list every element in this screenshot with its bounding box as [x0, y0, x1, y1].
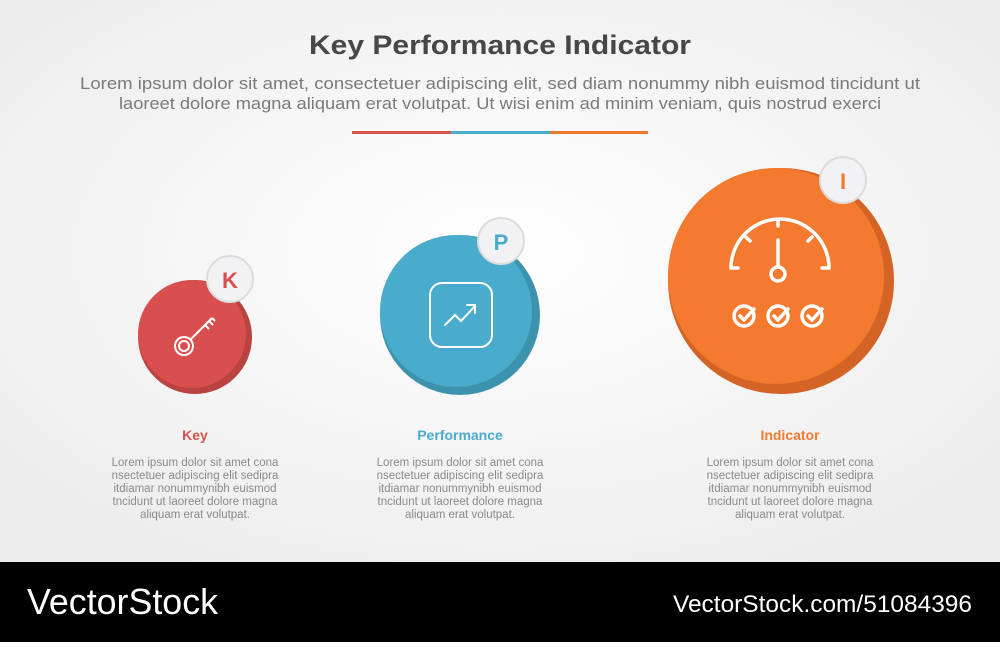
icon: gauge with checks — [731, 219, 829, 326]
text block: indicator: Indicator — [760, 427, 820, 443]
text block: indicator: nsectetuer adipiscing elit sedipra — [707, 470, 874, 482]
text block: performance: tncidunt ut laoreet dolore magna — [378, 496, 543, 508]
footer bar: VectorStock.com/51084396 — [673, 591, 972, 618]
text block: performance: Performance — [417, 427, 503, 443]
title: Key Performance Indicator — [309, 30, 692, 60]
text block: key — [112, 427, 279, 521]
circle: indicator — [668, 157, 894, 394]
text block: indicator: Lorem ipsum dolor sit amet cona — [707, 457, 874, 469]
badge I: I — [840, 169, 846, 194]
text block: indicator: itdiamar nonummynibh euismod — [708, 483, 872, 495]
footer bar: VectorStock — [27, 581, 219, 622]
text block: key: nsectetuer adipiscing elit sedipra — [112, 470, 279, 482]
badge P — [478, 218, 524, 264]
text block: key: Key — [182, 427, 208, 443]
subtitle: Lorem ipsum dolor sit amet, consectetuer adipiscing elit, sed diam nonummy nibh euismod tincidunt ut — [80, 74, 920, 93]
circle: key — [138, 256, 253, 394]
text block: key: Lorem ipsum dolor sit amet cona — [112, 457, 279, 469]
text block: performance: nsectetuer adipiscing elit sedipra — [377, 470, 544, 482]
icon: key — [175, 318, 215, 355]
text block: indicator — [707, 427, 874, 521]
text block: key: itdiamar nonummynibh euismod — [114, 483, 276, 495]
text block: indicator: tncidunt ut laoreet dolore magna — [708, 496, 873, 508]
divider tricolor — [352, 131, 648, 134]
icon: chart — [430, 283, 492, 347]
badge I — [820, 157, 866, 203]
text block: performance — [377, 427, 544, 521]
text block: performance: itdiamar nonummynibh euismod — [378, 483, 542, 495]
subtitle: laoreet dolore magna aliquam erat volutpat. Ut wisi enim ad minim veniam, quis nostrud exerci — [119, 94, 881, 113]
badge K: K — [222, 268, 238, 293]
badge P: P — [494, 230, 508, 255]
circle: performance — [380, 218, 540, 395]
text block: performance: Lorem ipsum dolor sit amet cona — [377, 457, 544, 469]
text block: key: tncidunt ut laoreet dolore magna — [113, 496, 278, 508]
text block: performance: aliquam erat volutpat. — [405, 509, 515, 521]
text block: indicator: aliquam erat volutpat. — [735, 509, 845, 521]
footer bar — [0, 562, 1000, 642]
subtitle — [80, 74, 920, 113]
text block: key: aliquam erat volutpat. — [140, 509, 250, 521]
